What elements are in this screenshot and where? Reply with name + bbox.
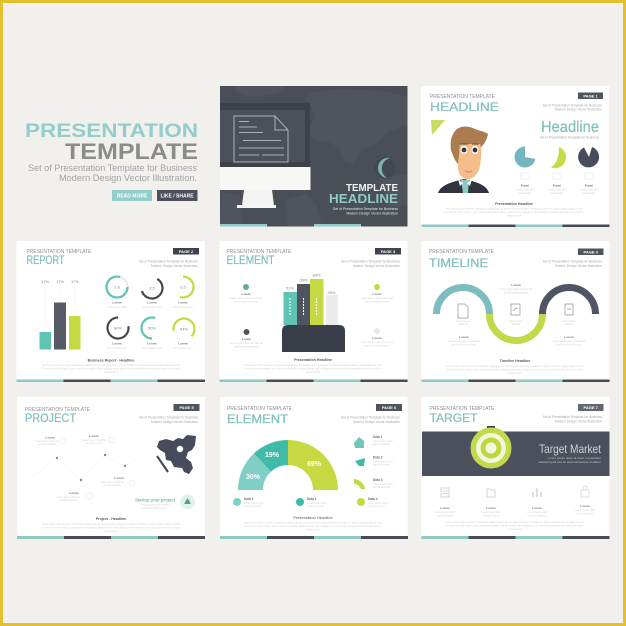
- ring labels: Lorem ipsum dolor: [107, 306, 127, 309]
- right item top: Lorem ipsum dolor sit amet elit: [361, 297, 394, 300]
- pie column labels: Lorem ipsum dolor: [515, 188, 535, 192]
- ring labels: Lorem ipsum dolor: [107, 347, 127, 350]
- book bar chart: 84%: [312, 272, 321, 278]
- description: Set of Presentation Template for Business: [341, 260, 400, 264]
- column 2: Lorem ipsum dolor: [481, 511, 501, 514]
- page badge: [174, 404, 200, 411]
- legend item 3: [357, 497, 388, 508]
- data item 1: Lorem ipsum dolor: [373, 440, 393, 443]
- left item top: sed do eiusmod tempor: [234, 300, 259, 304]
- caption body: [42, 523, 181, 533]
- dark base block: [282, 325, 345, 352]
- page badge: [375, 248, 401, 254]
- footer strip: [220, 380, 408, 382]
- caption body: Lorem ipsum dolor sit amet, consectetur adipiscing elit, sed do eiusmod tempor incididunt ut labore et dolore magna aliqua ut enim: [446, 365, 584, 368]
- small heading: PRESENTATION TEMPLATE: [227, 406, 293, 412]
- ring: 6.5: 6.5: [180, 284, 187, 290]
- arch: teal: [436, 288, 490, 314]
- column 4: sed do eiusmod: [577, 512, 594, 516]
- caption body: Lorem ipsum dolor sit amet, consectetur adipiscing elit, sed do eiusmod tempor incididunt ut labore et dolore magna aliqua ut enim: [446, 521, 584, 524]
- right label: [553, 335, 586, 346]
- startup callout: Lorem ipsum dolor sit amet: [141, 504, 170, 506]
- footer strip: [422, 380, 610, 382]
- data item 3: Data 3: [373, 478, 383, 482]
- ring labels: Lorem: [112, 342, 122, 346]
- column 2: Lorem: [486, 506, 496, 510]
- description: Modern Design Vector Illustration: [555, 108, 602, 112]
- label: lorem 2: [83, 434, 115, 445]
- data item 1: [354, 435, 393, 448]
- page badge: [578, 404, 604, 411]
- label: lorem 3: [101, 476, 135, 487]
- ring: 54%: 54%: [180, 326, 188, 332]
- page badge: [578, 92, 603, 99]
- data item 3: sed do eiusmod: [373, 486, 391, 489]
- right item bottom: [361, 328, 394, 348]
- icon: document 3: Lorem ipsum: [562, 320, 576, 323]
- left label: Lorem: [459, 335, 469, 339]
- ring labels: Lorem: [178, 300, 188, 304]
- left item bottom: sed do eiusmod tempor: [234, 346, 259, 348]
- top label: Lorem: [511, 283, 521, 287]
- like share button: LIKE / SHARE: [160, 194, 194, 200]
- caption body: Lorem ipsum dolor sit amet, consectetur adipiscing elit, sed do eiusmod tempor incididunt ut labore et dolore magna aliqua ut enim: [244, 522, 382, 524]
- ring: 80%: 80%: [114, 326, 122, 330]
- legend item 1: Data 2: [244, 497, 254, 501]
- icon: crescent moon: [374, 157, 396, 179]
- column 1: sed do eiusmod: [437, 514, 454, 518]
- column 3: sed do eiusmod: [529, 514, 546, 518]
- ring labels: Lorem: [147, 342, 157, 346]
- legend item 1: sed do eiusmod: [244, 505, 262, 508]
- column 4: [575, 486, 595, 516]
- data item 1: sed do eiusmod: [373, 443, 391, 446]
- world map silhouette: [220, 86, 407, 226]
- label: lorem 4: [57, 491, 92, 502]
- column 2: sed do eiusmod: [483, 514, 500, 518]
- bar chart: 17%: [41, 279, 49, 284]
- description: Set of Presentation Template for Business: [139, 416, 198, 420]
- page badge: [376, 404, 402, 411]
- right item bottom: sed do eiusmod tempor: [365, 344, 390, 348]
- legend item 1: Lorem ipsum dolor: [244, 502, 264, 505]
- segment: 30%: [238, 453, 271, 490]
- startup callout: [135, 494, 195, 510]
- caption title: Presentation Headline: [294, 358, 332, 362]
- left item top: Lorem: [241, 292, 251, 296]
- icon: document 1: dolor sit: [459, 323, 468, 326]
- icon: startup badge: [180, 494, 195, 510]
- ring labels: [107, 300, 193, 350]
- cover subtitle: Set of Presentation Template for Business: [333, 207, 398, 211]
- left label: [448, 335, 481, 346]
- caption title: Business Report - Headline: [88, 358, 134, 362]
- semicircle chart: 69%: [307, 461, 322, 468]
- description: Modern Design Vector Illustration: [353, 264, 400, 268]
- legend item 3: sed do eiusmod: [368, 505, 386, 508]
- small heading: PRESENTATION TEMPLATE: [430, 406, 495, 412]
- book bar chart: 65%: [299, 278, 308, 282]
- bar chart: 17%: [71, 279, 79, 284]
- page badge: PAGE 7: [584, 405, 599, 410]
- description: Modern Design Vector Illustration: [555, 420, 602, 424]
- book bar chart: 35%: [327, 290, 336, 295]
- ring labels: Lorem: [178, 342, 188, 346]
- data item 2: sed do eiusmod: [373, 464, 391, 466]
- description: Modern Design Vector Illustration: [555, 264, 602, 268]
- description: [543, 415, 602, 424]
- label: lorem 4: Lorem ipsum dolor sit: [57, 496, 80, 499]
- waypoint dots: [56, 454, 126, 481]
- intro text block: [25, 121, 198, 201]
- label: lorem 2: Lorem ipsum dolor sit: [83, 439, 106, 442]
- caption body: [446, 521, 585, 531]
- left item top: Lorem ipsum dolor sit amet elit: [230, 297, 263, 300]
- pie: green: [551, 147, 566, 168]
- segment: 19%: [254, 440, 288, 472]
- page badge: PAGE 5: [179, 405, 194, 410]
- heading: REPORT: [26, 253, 65, 267]
- description: Set of Presentation Template for Business: [543, 260, 602, 264]
- ring: 1.8: 1.8: [114, 284, 121, 290]
- top label: Lorem ipsum dolor sit amet elit: [500, 288, 533, 291]
- caption body: Ut enim ad minim veniam, quis nostrud exercitation ullamco laboris nisi ut aliquip ex ea commodo consequat duis aute irure dolor in: [42, 526, 181, 530]
- read more button: READ MORE: [117, 194, 148, 200]
- caption body: Lorem ipsum dolor sit amet, consectetur adipiscing elit, sed do eiusmod tempor incididunt ut labore et dolore magna aliqua ut enim: [445, 208, 583, 210]
- small heading: PRESENTATION TEMPLATE: [26, 249, 92, 255]
- caption title: Project - Headline: [96, 517, 126, 521]
- footer strip: [422, 224, 610, 227]
- caption body: [446, 365, 585, 375]
- legend item 2: Lorem ipsum dolor: [307, 502, 327, 505]
- subtitle: [28, 163, 197, 184]
- column 1: Lorem: [440, 506, 450, 510]
- icon: monitor: [220, 103, 310, 208]
- arch: green: [490, 314, 542, 341]
- heading: TARGET: [430, 411, 478, 425]
- pie column labels: [515, 173, 599, 195]
- right item top: Lorem: [372, 292, 382, 296]
- top label: [500, 283, 533, 294]
- data item 2: Data 2: [373, 456, 383, 460]
- dashed flight path: [30, 445, 157, 480]
- semicircle chart: 19%: [265, 452, 280, 459]
- caption body: Lorem ipsum dolor sit amet, consectetur adipiscing elit, sed do eiusmod tempor incididunt ut labore et dolore magna aliqua ut enim: [244, 364, 382, 367]
- caption title: Timeline Headline: [500, 359, 530, 363]
- semicircle chart: 30%: [246, 474, 261, 481]
- label: lorem 3: Lorem ipsum dolor sit: [101, 481, 124, 484]
- startup callout: sed do eiusmod tempor: [143, 507, 168, 510]
- subheading: Headline: [541, 119, 599, 136]
- description: Set of Presentation Template for Business: [139, 260, 198, 264]
- label: lorem 2: Lorem: [89, 434, 99, 438]
- icon: rocket: [157, 435, 196, 474]
- small heading: PRESENTATION TEMPLATE: [226, 249, 292, 255]
- description: [543, 260, 602, 268]
- heading: PROJECT: [25, 411, 77, 425]
- read more button: [112, 190, 152, 201]
- timeline wave: [436, 288, 596, 341]
- column 2: [481, 489, 501, 518]
- page badge: [173, 248, 199, 254]
- panel: page 7 target: [422, 397, 610, 539]
- ring labels: Lorem ipsum dolor: [142, 306, 162, 309]
- dark band: [422, 432, 610, 476]
- small heading: PRESENTATION TEMPLATE: [429, 249, 495, 255]
- data item 3: Lorem ipsum dolor: [373, 483, 393, 486]
- column 1: Lorem ipsum dolor: [435, 511, 455, 514]
- icon: document 2: [509, 304, 523, 326]
- book bar chart: 51%: [286, 286, 294, 290]
- description: [543, 104, 602, 112]
- ring labels: Lorem: [112, 300, 122, 304]
- column 4: Lorem: [580, 504, 590, 508]
- left item bottom: Lorem ipsum dolor sit amet elit: [230, 342, 263, 345]
- column 3: Lorem ipsum dolor: [527, 511, 547, 514]
- page badge: PAGE 3: [381, 249, 396, 254]
- right item top: sed do eiusmod tempor: [365, 300, 390, 304]
- footer strip: [220, 224, 361, 226]
- legend item 2: Data 1: [307, 497, 317, 501]
- data item 1: Data 1: [373, 435, 383, 439]
- icon: document 2: Lorem ipsum: [509, 320, 523, 323]
- left item top: [230, 284, 263, 304]
- icon: target: [470, 426, 512, 468]
- caption body: Ut enim ad minim veniam, quis nostrud exercitation ullamco laboris nisi ut aliquip ex ea commodo consequat duis aute irure dolor in: [446, 368, 585, 372]
- panel: page 2 report: [16, 241, 205, 382]
- label: lorem 1: sed do eiusmod: [39, 443, 56, 446]
- caption body: [444, 208, 584, 218]
- bar chart: [40, 279, 80, 350]
- ring labels: Lorem: [147, 300, 157, 304]
- legend item 1: [233, 497, 264, 508]
- legend item 3: Lorem ipsum dolor: [368, 502, 388, 505]
- description: [341, 260, 400, 268]
- description: [139, 260, 198, 268]
- ring labels: Lorem ipsum dolor: [173, 347, 193, 350]
- top label: sed do eiusmod tempor: [504, 292, 529, 294]
- startup callout: Startup your project: [135, 498, 176, 502]
- label: lorem 3: sed do eiusmod: [104, 484, 121, 487]
- caption body: reprehenderit: [507, 214, 521, 218]
- book bar chart: [284, 272, 338, 325]
- like share button: [157, 190, 198, 201]
- data item 2: [355, 456, 393, 466]
- caption body: Ut enim ad minim veniam, quis nostrud exercitation ullamco laboris nisi ut aliquip ex ea commodo consequat duis aute irure dolor in: [446, 524, 585, 528]
- heading: HEADLINE: [430, 100, 499, 114]
- semicircle chart: [238, 440, 338, 490]
- caption title: Presentation Headline: [293, 515, 333, 520]
- page badge: PAGE 2: [179, 249, 194, 254]
- caption body: Ut enim ad minim veniam, quis nostrud exercitation ullamco laboris nisi ut aliquip ex ea commodo consequat duis aute irure dolor in: [42, 368, 181, 370]
- description: Modern Design Vector Illustration: [151, 420, 198, 424]
- title: template: TEMPLATE: [65, 139, 198, 164]
- footer strip: [422, 536, 610, 539]
- legend item 2: [296, 497, 327, 508]
- legend item 3: Data 4: [368, 497, 378, 501]
- small heading: PRESENTATION TEMPLATE: [25, 407, 91, 413]
- badge triangle: [431, 120, 445, 135]
- subtitle: Set of Presentation Template for Business: [28, 163, 197, 174]
- caption title: Presentation Headline: [495, 202, 533, 206]
- left label: sed do eiusmod tempor: [452, 344, 477, 346]
- caption body: Ut enim ad minim veniam, quis nostrud exercitation ullamco laboris nisi ut aliquip ex ea commodo consequat duis aute irure dolor in: [444, 211, 584, 214]
- footer strip: [220, 536, 408, 539]
- icon: document 1: [456, 304, 470, 326]
- target market caption: Lorem ipsum dolor sit amet, consectetur: [548, 456, 601, 460]
- right label: Lorem ipsum dolor sit amet elit: [553, 340, 586, 343]
- cover subtitle: [333, 207, 398, 216]
- column 1: [435, 488, 455, 518]
- bar chart: 17%: [56, 279, 64, 284]
- icon: document 1: Lorem ipsum: [456, 320, 470, 323]
- target market title: Target Market: [539, 442, 602, 456]
- label: lorem 1: Lorem ipsum dolor sit: [36, 440, 59, 443]
- pie column labels: Lorem ipsum dolor: [579, 188, 599, 192]
- panel: page 3 element: [220, 241, 408, 382]
- caption body: reprehenderit: [306, 371, 320, 374]
- cover subtitle: Modern Design Vector Illustration: [346, 212, 398, 216]
- panel: page 1 headline: [421, 86, 610, 227]
- pie column labels: sit amet elit: [519, 192, 531, 195]
- right label: sed do eiusmod tempor: [557, 344, 582, 346]
- illustration: businessman: [438, 127, 489, 193]
- label: lorem 2: sed do eiusmod: [86, 442, 103, 445]
- pie column labels: sit amet elit: [583, 192, 595, 195]
- description: Modern Design Vector Illustration: [353, 420, 400, 424]
- title: presentation: PRESENTATION: [25, 121, 198, 142]
- page badge: PAGE 4: [584, 250, 599, 254]
- description: Modern Design Vector Illustration: [151, 264, 198, 268]
- icon: document: [234, 116, 288, 162]
- description: [139, 416, 198, 424]
- page badge: [578, 248, 604, 255]
- data item 2: Lorem ipsum dolor: [373, 460, 393, 464]
- caption body: reprehenderit: [306, 528, 320, 532]
- caption body: Ut enim ad minim veniam, quis nostrud exercitation ullamco laboris nisi ut aliquip ex ea commodo consequat duis aute irure dolor in: [244, 368, 383, 370]
- label: lorem 4: Lorem: [69, 491, 79, 495]
- caption body: reprehenderit: [104, 530, 118, 533]
- description: Set of Presentation Template for Business: [543, 104, 602, 108]
- column 4: Lorem ipsum dolor: [575, 509, 595, 512]
- footer strip: [17, 536, 205, 539]
- left label: Lorem ipsum dolor sit amet elit: [448, 340, 481, 343]
- footer strip: [16, 380, 205, 382]
- description: [341, 416, 400, 424]
- target market caption: [538, 456, 601, 464]
- pie column labels: Email: [553, 184, 561, 188]
- ring: 50%: 50%: [148, 326, 156, 330]
- legend item 2: sed do eiusmod: [307, 505, 325, 508]
- caption body: Ut enim ad minim veniam, quis nostrud exercitation ullamco laboris nisi ut aliquip ex ea commodo consequat duis aute irure dolor in: [244, 525, 383, 528]
- description: Set of Presentation Template for Business: [341, 416, 400, 420]
- caption body: [42, 364, 181, 374]
- icon: document 3: dolor sit: [565, 323, 574, 326]
- arch: dark: [542, 288, 596, 314]
- icon: document 3: [562, 304, 576, 326]
- data item 3: [354, 478, 393, 489]
- panel: page 5 project: [17, 397, 205, 539]
- panel: page 6 element: [220, 397, 408, 539]
- small heading: PRESENTATION TEMPLATE: [430, 94, 496, 100]
- subtitle: Modern Design Vector Illustration.: [59, 173, 197, 184]
- pie column labels: sit amet elit: [551, 192, 563, 195]
- column 3: Lorem: [532, 506, 542, 510]
- label: lorem 3: Lorem: [114, 476, 124, 480]
- caption body: reprehenderit: [508, 528, 522, 531]
- left item bottom: [230, 329, 263, 348]
- caption body: Lorem ipsum dolor sit amet, consectetur adipiscing elit, sed do eiusmod tempor incididunt ut labore et dolore magna aliqua ut enim: [42, 523, 180, 526]
- caption body: [244, 364, 383, 374]
- pie: blue: [514, 146, 535, 168]
- ring: 3.5: 3.5: [149, 286, 156, 290]
- label: lorem 4: sed do eiusmod: [60, 499, 77, 502]
- caption body: reprehenderit: [104, 371, 118, 374]
- right label: Lorem: [564, 335, 574, 339]
- heading: ELEMENT: [226, 253, 275, 267]
- left item bottom: Lorem: [242, 337, 251, 341]
- pie: dark: [578, 147, 599, 167]
- target market caption: adipiscing elit sed do eiusmod tempor ut labore: [538, 460, 601, 464]
- caption body: reprehenderit: [508, 372, 522, 375]
- right item bottom: Lorem ipsum dolor sit amet elit: [361, 341, 394, 344]
- caption body: Lorem ipsum dolor sit amet, consectetur adipiscing elit, sed do eiusmod tempor incididunt ut labore et dolore magna aliqua ut enim: [42, 364, 180, 367]
- subheading caption: Set of Presentation Template for Business: [540, 136, 599, 140]
- heading: TIMELINE: [429, 256, 488, 270]
- panel: hero cover: [220, 86, 408, 226]
- ring labels: Lorem ipsum dolor: [173, 306, 193, 309]
- icon: document 2: dolor sit: [512, 323, 521, 326]
- panel: page 4 timeline: [422, 241, 610, 382]
- segment: 69%: [288, 440, 338, 490]
- heading: ELEMENT: [227, 412, 289, 426]
- label: lorem 1: [36, 436, 66, 446]
- pie column labels: Lorem ipsum dolor: [547, 188, 567, 192]
- description: Set of Presentation Template for Business: [543, 415, 602, 419]
- right item bottom: Lorem: [372, 336, 382, 340]
- caption body: [244, 522, 383, 532]
- ring charts: [106, 274, 196, 341]
- label: lorem 1: Lorem: [45, 436, 55, 440]
- column 3: [527, 488, 547, 518]
- page badge: PAGE 6: [382, 405, 397, 410]
- ring labels: Lorem ipsum dolor: [142, 347, 162, 350]
- page badge: PAGE 1: [583, 94, 598, 98]
- right item top: [361, 284, 394, 304]
- pie column labels: Email: [521, 184, 529, 188]
- cover headline: HEADLINE: [329, 192, 398, 206]
- pie column labels: Email: [585, 184, 593, 188]
- cover heading: TEMPLATE: [346, 183, 398, 194]
